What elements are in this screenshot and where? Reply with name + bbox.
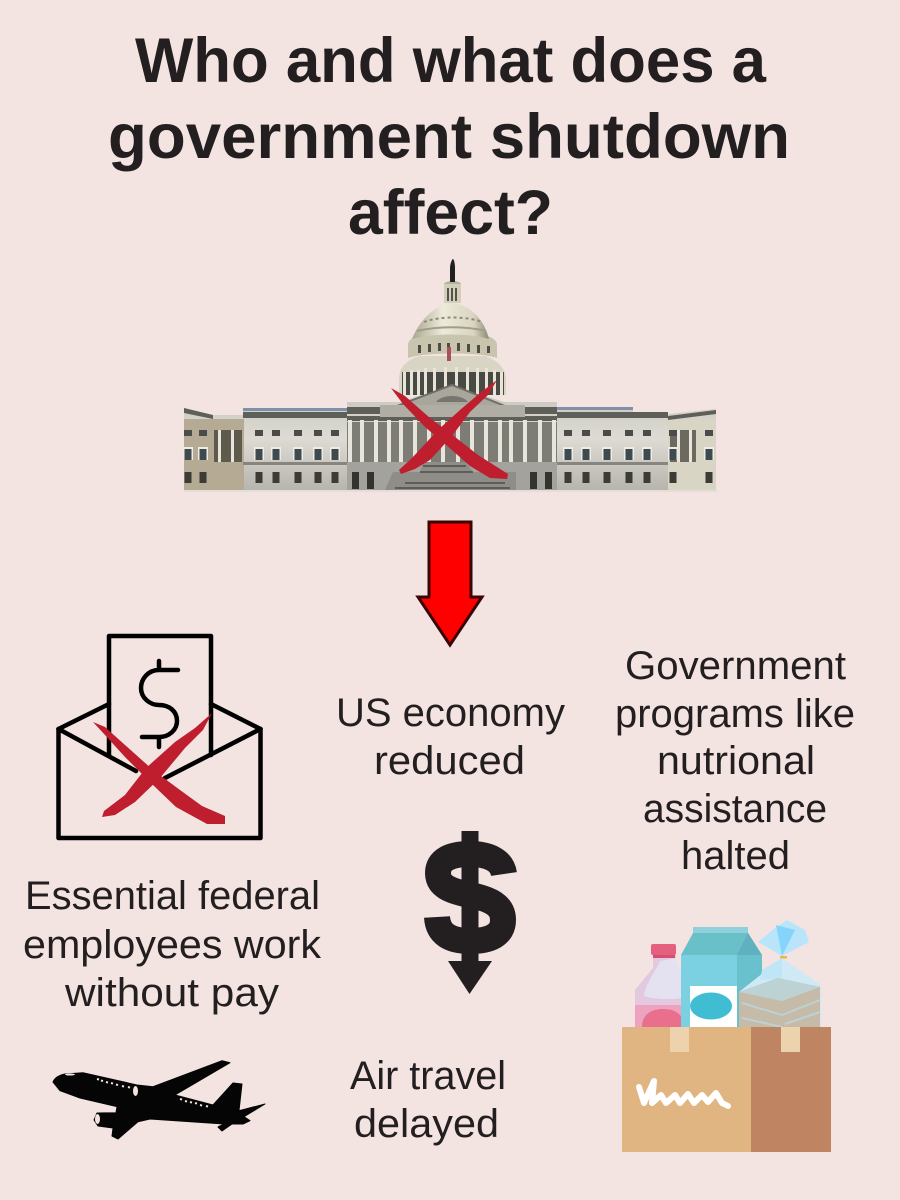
bread loaf in bag [739,920,821,1027]
text: essential federal employees [23,874,322,1015]
wings and central block [184,385,716,492]
text: essential federal employees: Essential federal [25,874,320,918]
red cross mark [93,713,225,824]
icon: pay envelope crossed out [58,636,260,838]
text: air travel delayed [350,1054,506,1146]
dome [399,259,506,395]
text: air travel delayed: Air travel [350,1054,506,1098]
text: essential federal employees: employees work [23,923,322,967]
title: Who and what does a [135,26,767,96]
red cross mark [391,380,508,479]
pediment [397,385,505,406]
text: government programs halted [615,644,855,878]
cardboard box [622,1027,831,1152]
text: US economy reduced [336,691,565,783]
icon: US Capitol building crossed out [183,259,717,492]
title [108,26,790,248]
text: US economy reduced: US economy [336,691,565,735]
milk carton [681,927,762,1027]
arrow pointing down [418,522,482,645]
icon: airplane silhouette [53,1061,265,1139]
title: affect? [348,178,553,248]
colonnade columns [218,420,692,463]
windows [183,430,714,483]
stairs [384,462,516,492]
icon: grocery donation box [622,920,831,1152]
bottle [635,944,691,1027]
text: US economy reduced: reduced [374,739,525,783]
text: essential federal employees: without pay [64,971,279,1015]
text: government programs halted: programs like [615,692,855,736]
icon: dollar sign with down arrow [437,831,504,994]
title: government shutdown [108,102,790,172]
text: government programs halted: nutrional [657,739,815,783]
text: air travel delayed: delayed [354,1102,499,1146]
text: government programs halted: Government [625,644,846,688]
text: government programs halted: halted [681,834,790,878]
text: government programs halted: assistance [643,787,827,831]
